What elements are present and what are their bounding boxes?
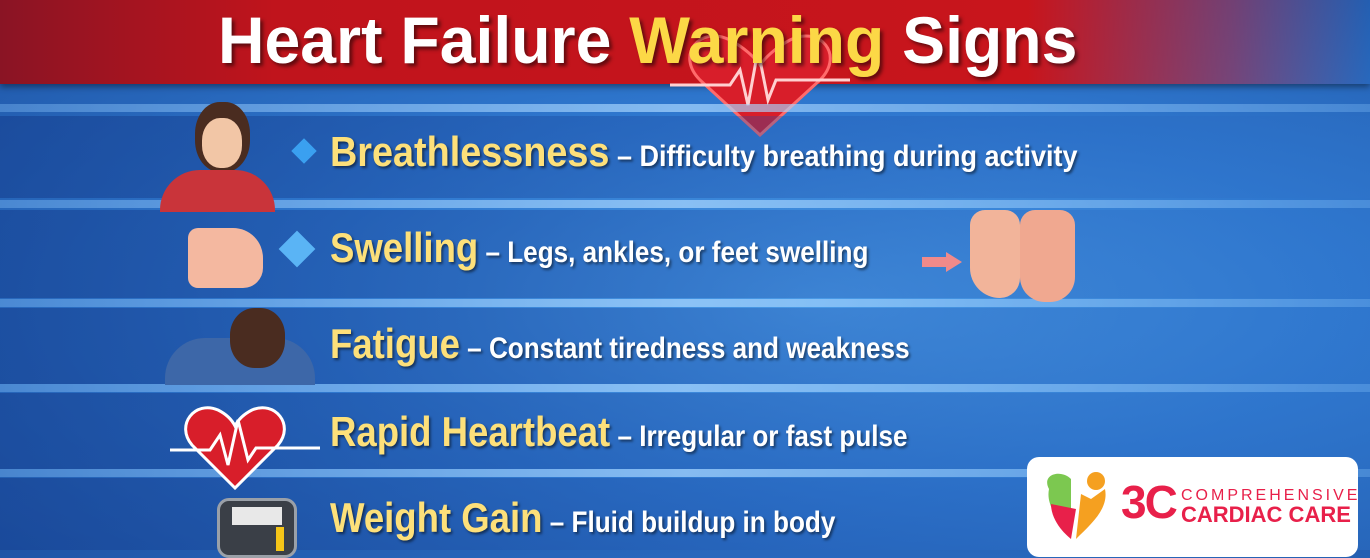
logo text: 3C (1121, 476, 1176, 528)
row: breathlessness: Breathlessness – Difficulty breathing during activity (330, 128, 1078, 175)
icon: swollen foot (188, 228, 263, 288)
icon: swollen feet (922, 210, 1075, 302)
diamond (291, 138, 317, 164)
logo card: CARDIAC CARE (1181, 502, 1351, 527)
icon: scale (217, 498, 297, 558)
row: rapid heartbeat: Rapid Heartbeat – Irregular or fast pulse (330, 408, 908, 455)
icon: heart rate (170, 406, 320, 490)
icon: heart with ecg (670, 34, 850, 137)
icon: logo heart (1047, 472, 1106, 539)
title: Heart Failure Warning Signs (218, 3, 1077, 77)
title banner (0, 0, 1370, 84)
icon: breathless woman (160, 102, 275, 212)
row: swelling: Swelling – Legs, ankles, or feet swelling (330, 224, 868, 271)
icon: tired woman (165, 308, 315, 385)
logo card (1027, 457, 1358, 557)
row: fatigue: Fatigue – Constant tiredness and weakness (330, 320, 910, 367)
row: weight gain: Weight Gain – Fluid buildup in body (330, 494, 835, 541)
diamond (279, 231, 315, 267)
logo card: COMPREHENSIVE (1181, 487, 1360, 504)
